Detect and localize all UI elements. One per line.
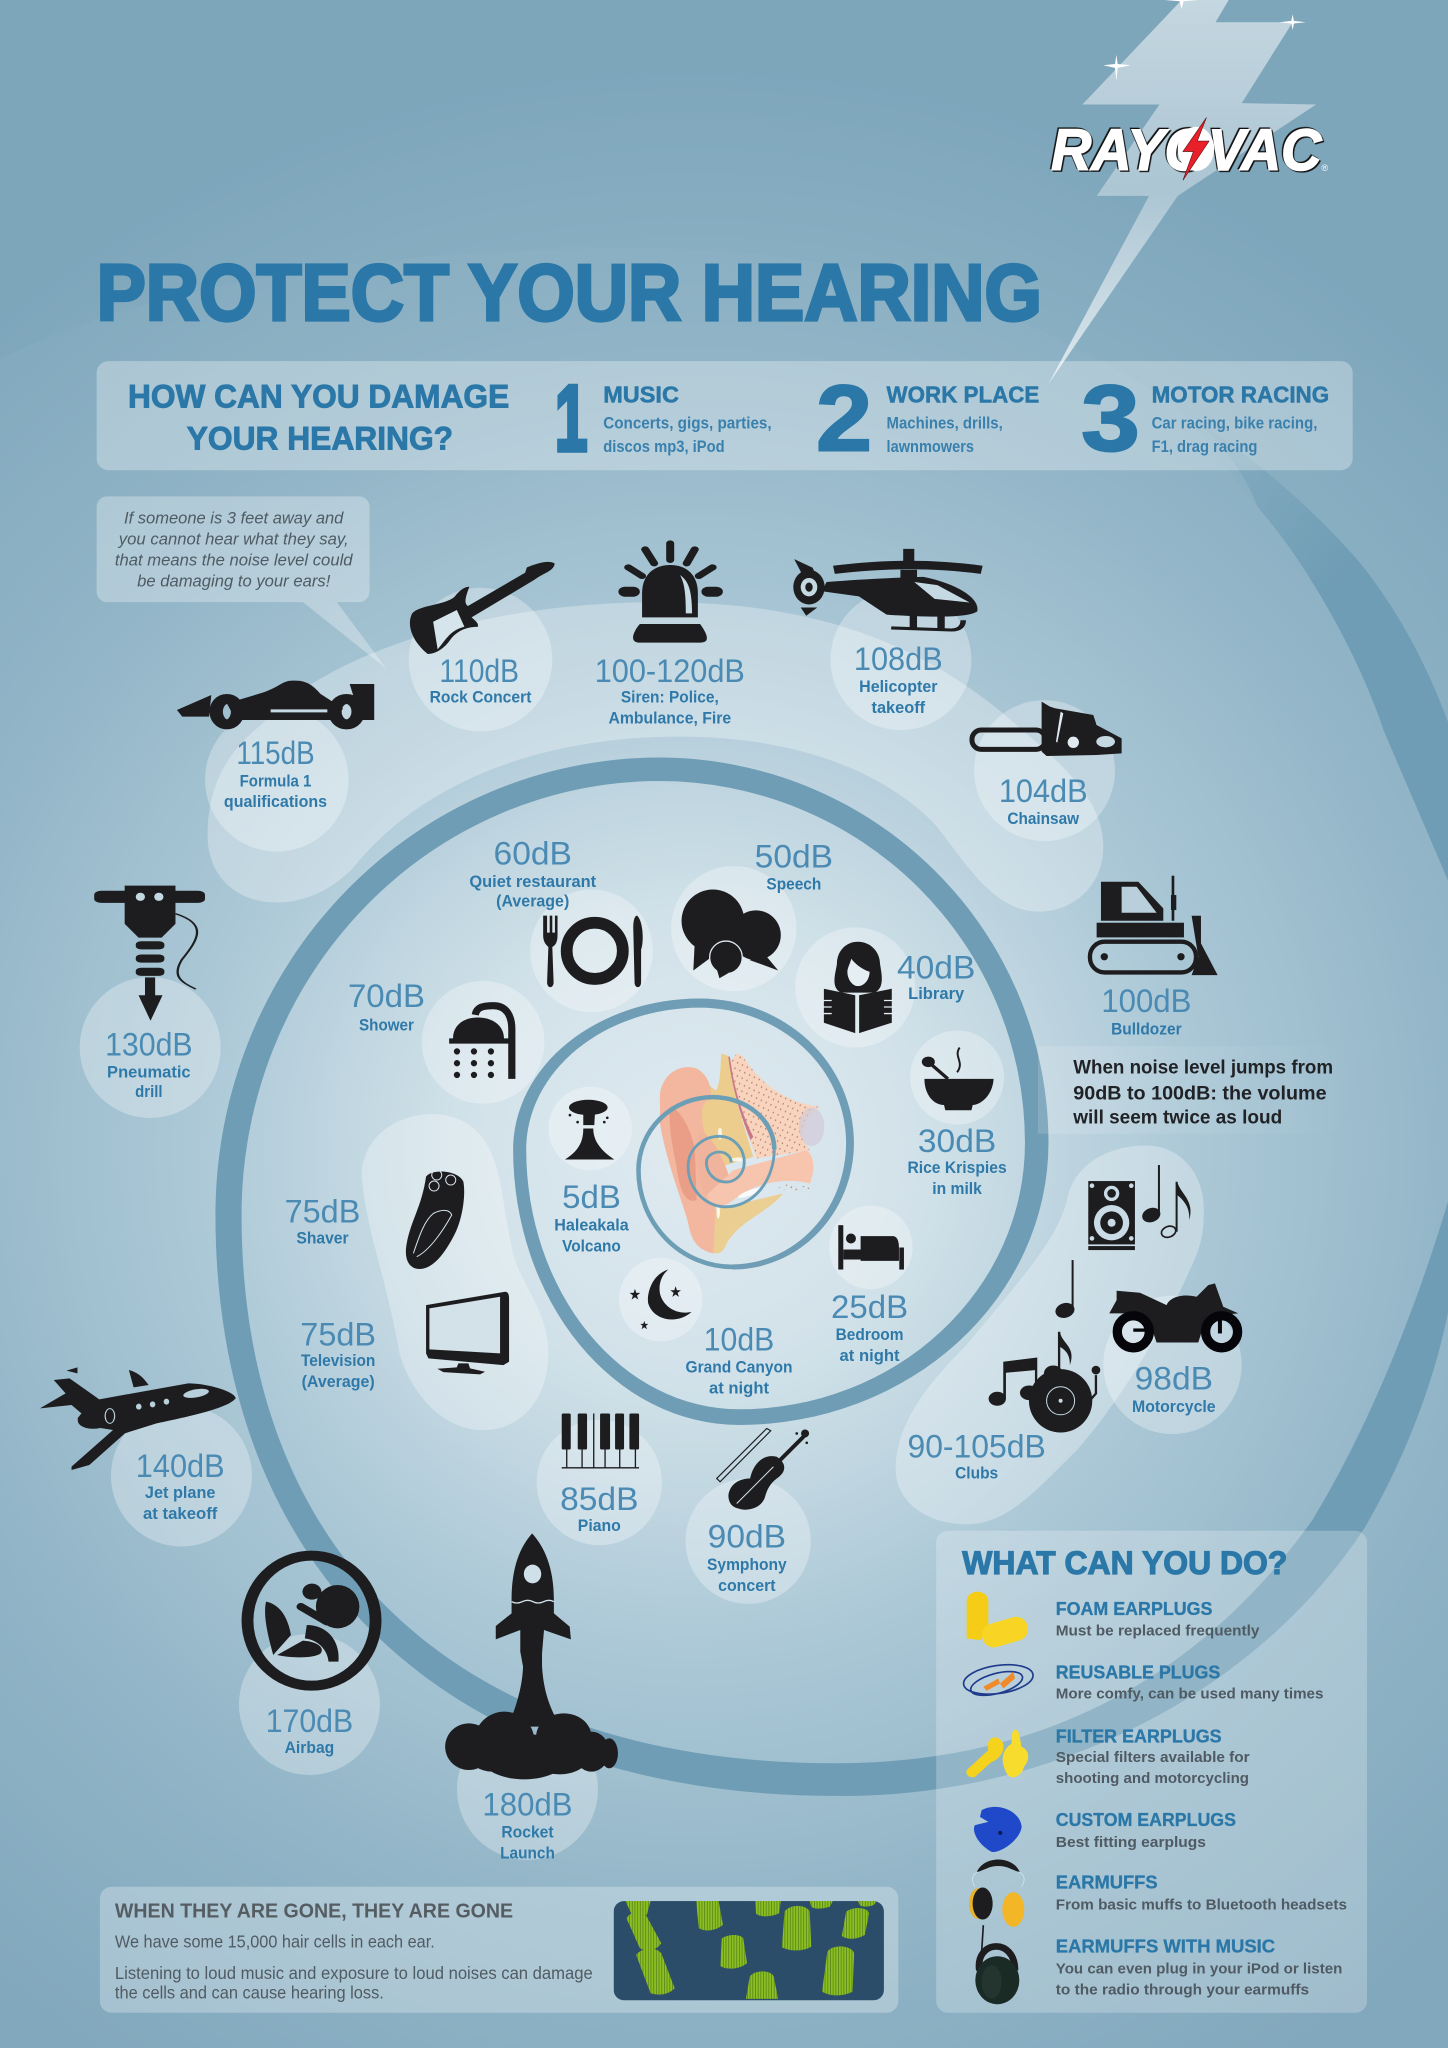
label: 70dB	[348, 977, 425, 1014]
cause 1: music: 1	[555, 366, 588, 471]
panel: when they are gone	[100, 1887, 898, 2013]
label: 180dB	[482, 1786, 573, 1823]
label	[1101, 982, 1191, 1038]
label: 30dB	[918, 1122, 996, 1159]
body text: We have some 15,000 hair cells in each ear.	[115, 1931, 435, 1951]
label	[560, 1480, 638, 1535]
item: custom earplugs: Best fitting earplugs	[1056, 1834, 1206, 1851]
label: Shower	[359, 1017, 415, 1035]
entry: 115dB formula 1	[177, 681, 374, 852]
label: Chainsaw	[1007, 810, 1079, 828]
label: concert	[718, 1577, 776, 1595]
icon: siren	[625, 543, 716, 643]
label	[105, 1025, 193, 1101]
logo: RAYOVAC	[1051, 118, 1323, 183]
label	[685, 1321, 793, 1398]
inner spiral	[638, 1097, 774, 1267]
label	[854, 640, 943, 717]
icon: motorcycle	[1109, 1283, 1238, 1348]
cause 3: motor racing: F1, drag racing	[1152, 438, 1257, 456]
icon: piano keys	[562, 1413, 639, 1468]
label	[907, 1428, 1046, 1483]
image: hair cells	[614, 1901, 884, 2000]
loud sounds blob	[208, 602, 1103, 912]
cause 1: music: Concerts, gigs, parties,	[603, 414, 772, 432]
heading: WHAT CAN YOU DO?	[962, 1544, 1287, 1581]
item: reusable plugs: REUSABLE PLUGS	[1056, 1661, 1220, 1682]
label	[755, 837, 833, 893]
label: 90-105dB	[907, 1428, 1046, 1465]
entry: 85dB piano	[537, 1413, 662, 1545]
entry: 108dB helicopter	[793, 549, 983, 730]
label: 40dB	[897, 948, 975, 985]
label: 170dB	[266, 1702, 353, 1739]
entry: 70dB shower	[348, 977, 544, 1104]
entry: 170dB airbag	[239, 1556, 380, 1775]
heading: YOUR HEARING?	[187, 419, 453, 456]
cause 2: work place: Machines, drills,	[887, 414, 1003, 432]
spiral band tail	[1175, 405, 1448, 880]
icon: bowl	[922, 1048, 994, 1110]
entry: 180dB rocket launch	[445, 1533, 618, 1863]
label: Formula 1	[240, 772, 311, 790]
label: 60dB	[494, 835, 572, 872]
icon: vinyl and notes	[989, 1260, 1100, 1432]
item: earmuffs: EARMUFFS	[1056, 1872, 1158, 1893]
label: 25dB	[831, 1288, 908, 1325]
label: Siren: Police,	[621, 689, 719, 707]
callout: 3 feet	[97, 496, 386, 669]
icon: helicopter	[793, 549, 983, 630]
label: Symphony	[707, 1556, 787, 1574]
label: takeoff	[872, 699, 926, 717]
label: Rock Concert	[430, 689, 532, 707]
cause 3: motor racing: MOTOR RACING	[1152, 381, 1329, 407]
entry: 40dB library	[795, 927, 975, 1048]
label: drill	[135, 1083, 163, 1101]
label: Volcano	[562, 1237, 621, 1255]
icon: moon and stars	[630, 1270, 692, 1329]
ear illustration	[660, 1053, 824, 1254]
item: earmuffs	[969, 1860, 1347, 1927]
item: earmuffs with music: You can even plug in your iPod or listen	[1056, 1961, 1342, 1978]
cause 1: music: discos mp3, iPod	[603, 438, 725, 456]
label: at takeoff	[143, 1505, 218, 1523]
label: 98dB	[1135, 1360, 1213, 1397]
label	[430, 652, 532, 707]
entry: 30dB rice krispies	[907, 1031, 1007, 1198]
label: Speech	[766, 875, 821, 893]
label: 140dB	[136, 1447, 225, 1484]
label	[897, 948, 975, 1003]
label: Shaver	[296, 1229, 349, 1247]
label: Airbag	[285, 1739, 334, 1757]
icon: volcano	[565, 1100, 614, 1159]
body text: Listening to loud music and exposure to loud noises can damage	[115, 1963, 593, 1983]
label	[285, 1193, 360, 1247]
shaver and television blob	[362, 1114, 548, 1430]
label: 104dB	[999, 772, 1088, 809]
icon: speaker and music notes	[1088, 1165, 1191, 1250]
cause 2: work place: 2	[816, 366, 872, 471]
label	[469, 835, 597, 910]
spiral band	[215, 758, 1448, 1796]
icon: speech bubbles	[682, 889, 781, 978]
entry: 90-105dB clubs	[907, 1165, 1191, 1483]
item: custom earplugs: CUSTOM EARPLUGS	[1056, 1809, 1236, 1830]
entry: 104dB chainsaw	[972, 700, 1122, 841]
icon: shower	[449, 1006, 512, 1079]
icon: plate and cutlery	[543, 916, 643, 987]
label: Bulldozer	[1111, 1020, 1182, 1038]
panel: how can you damage your hearing	[97, 361, 1353, 471]
label: 130dB	[105, 1025, 193, 1062]
item: filter earplugs: shooting and motorcycling	[1056, 1770, 1249, 1787]
entry: 10dB grand canyon	[619, 1258, 793, 1398]
callout: volume twice as loud: When noise level jumps from	[1073, 1058, 1333, 1079]
icon: shaver	[406, 1170, 464, 1269]
label	[1132, 1360, 1216, 1416]
label: at night	[840, 1347, 900, 1365]
music and clubs blob	[896, 1145, 1204, 1524]
label	[348, 977, 425, 1035]
callout: 3 feet: If someone is 3 feet away and	[124, 510, 344, 528]
item: earmuffs with music: to the radio through your earmuffs	[1056, 1981, 1309, 1998]
label	[224, 734, 327, 811]
label: Jet plane	[145, 1484, 215, 1502]
heading	[128, 378, 509, 456]
heading: HOW CAN YOU DAMAGE	[128, 378, 509, 415]
label: Pneumatic	[107, 1064, 191, 1082]
icon: chainsaw	[972, 702, 1122, 756]
label: 108dB	[854, 640, 943, 677]
label: 50dB	[755, 837, 833, 874]
label	[266, 1702, 353, 1757]
entry: 100dB bulldozer	[1090, 876, 1218, 1038]
icon: person reading	[823, 942, 894, 1033]
item: earmuffs with music: EARMUFFS WITH MUSIC	[1056, 1936, 1275, 1957]
icon: television	[426, 1292, 509, 1374]
entry: 25dB bedroom	[829, 1206, 913, 1365]
heading: WHEN THEY ARE GONE, THEY ARE GONE	[115, 1900, 513, 1922]
callout: volume twice as loud: will seem twice as loud	[1072, 1107, 1282, 1128]
callout: volume twice as loud: 90dB to 100dB: the volume	[1073, 1084, 1327, 1105]
label	[907, 1122, 1007, 1198]
item: earmuffs: From basic muffs to Bluetooth headsets	[1056, 1897, 1347, 1914]
item: custom earplugs	[974, 1807, 1236, 1852]
label: at night	[709, 1380, 770, 1398]
item: foam earplugs	[967, 1592, 1260, 1650]
label: in milk	[932, 1180, 983, 1198]
cause 3: motor racing	[1081, 366, 1329, 471]
label: 110dB	[439, 652, 519, 689]
entry: 50dB speech	[671, 837, 833, 991]
label	[707, 1518, 787, 1595]
label	[999, 772, 1088, 828]
item: filter earplugs: FILTER EARPLUGS	[1056, 1725, 1222, 1746]
icon: rocket	[445, 1533, 618, 1779]
panel: what can you do	[936, 1531, 1367, 2013]
cause 2: work place: WORK PLACE	[887, 381, 1039, 407]
label: Clubs	[955, 1465, 998, 1483]
callout: 3 feet: that means the noise level could	[115, 552, 353, 570]
label: Haleakala	[554, 1216, 630, 1234]
entry: 90dB symphony	[685, 1428, 811, 1604]
logo: ®	[1321, 163, 1328, 173]
body text	[115, 1931, 593, 2002]
label: Helicopter	[859, 678, 938, 696]
label: Motorcycle	[1132, 1398, 1216, 1416]
label: Bedroom	[836, 1326, 904, 1344]
label	[595, 652, 745, 728]
icon: bulldozer	[1090, 876, 1218, 975]
cause 1: music	[555, 366, 772, 471]
label	[831, 1288, 908, 1365]
label: (Average)	[302, 1373, 375, 1391]
entry: 130dB pneumatic drill	[80, 886, 221, 1118]
item: foam earplugs: FOAM EARPLUGS	[1056, 1598, 1212, 1619]
icon: guitar	[410, 562, 555, 654]
icon: airbag	[247, 1556, 376, 1686]
label: Television	[301, 1352, 375, 1370]
label: 115dB	[236, 734, 315, 771]
callout: 3 feet: you cannot hear what they say,	[118, 531, 349, 549]
body text: the cells and can cause hearing loss.	[115, 1982, 384, 2002]
label: 90dB	[708, 1518, 786, 1555]
entry: 60dB quiet restaurant	[469, 835, 653, 1012]
label	[136, 1447, 225, 1523]
label: Rocket	[501, 1824, 554, 1842]
cause 2: work place: lawnmowers	[887, 438, 974, 456]
label: 75dB	[285, 1193, 360, 1230]
entry: 110dB rock concert	[409, 562, 555, 731]
label: 85dB	[560, 1480, 638, 1517]
entry: 140dB jet plane	[40, 1367, 252, 1546]
item: filter earplugs: Special filters available for	[1056, 1749, 1250, 1766]
cause 2: work place	[816, 366, 1039, 471]
label: qualifications	[224, 793, 327, 811]
callout: 3 feet: be damaging to your ears!	[137, 572, 331, 590]
label: 100-120dB	[595, 652, 745, 689]
icon: jet plane	[40, 1367, 236, 1470]
label: Piano	[578, 1517, 621, 1535]
entry: 100-120dB siren	[595, 543, 745, 728]
entry: 75dB television	[300, 1292, 509, 1391]
icon: bed	[838, 1225, 904, 1270]
label: Library	[908, 985, 964, 1003]
label: 100dB	[1101, 982, 1191, 1019]
cause 3: motor racing: 3	[1081, 366, 1140, 471]
cause 1: music: MUSIC	[603, 381, 679, 407]
item: reusable plugs	[962, 1661, 1323, 1703]
icon: pneumatic drill	[94, 886, 205, 1021]
cause 3: motor racing: Car racing, bike racing,	[1152, 414, 1317, 432]
label: Launch	[500, 1845, 555, 1863]
callout: volume twice as loud	[1038, 1046, 1358, 1134]
item: filter earplugs	[966, 1725, 1250, 1787]
icon: race car	[177, 681, 374, 724]
entry: 98dB motorcycle	[1103, 1283, 1242, 1434]
entry: 5dB haleakala volcano	[548, 1087, 632, 1255]
label: Quiet restaurant	[469, 873, 597, 891]
label: 10dB	[704, 1321, 774, 1358]
entry: 75dB shaver	[285, 1170, 464, 1269]
title: PROTECT YOUR HEARING	[97, 248, 1042, 337]
item: reusable plugs: More comfy, can be used many times	[1056, 1686, 1323, 1703]
label: Rice Krispies	[907, 1159, 1007, 1177]
lightning bolt	[1048, 0, 1316, 384]
label: Ambulance, Fire	[608, 710, 731, 728]
label	[300, 1315, 376, 1391]
label: 75dB	[300, 1315, 376, 1352]
label: (Average)	[496, 892, 569, 910]
label	[482, 1786, 573, 1863]
label: Grand Canyon	[685, 1359, 793, 1377]
label: 5dB	[562, 1178, 621, 1215]
label	[554, 1178, 630, 1255]
item: earmuffs with music	[975, 1925, 1342, 2004]
icon: violin	[717, 1428, 809, 1510]
item: foam earplugs: Must be replaced frequently	[1056, 1622, 1260, 1639]
